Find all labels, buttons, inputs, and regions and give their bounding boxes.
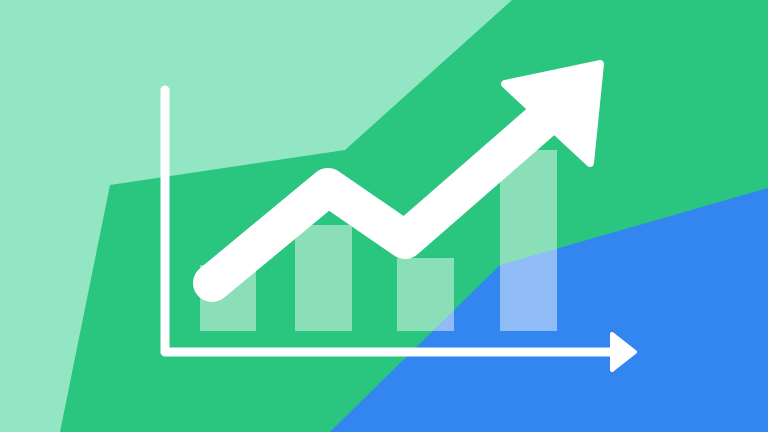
trend arrow: [212, 64, 600, 283]
background: light green region: [0, 0, 512, 432]
background: blue region: [330, 188, 768, 432]
bar chart: [200, 150, 557, 331]
icon: x-axis arrowhead: [612, 334, 635, 370]
axes: [165, 90, 622, 352]
